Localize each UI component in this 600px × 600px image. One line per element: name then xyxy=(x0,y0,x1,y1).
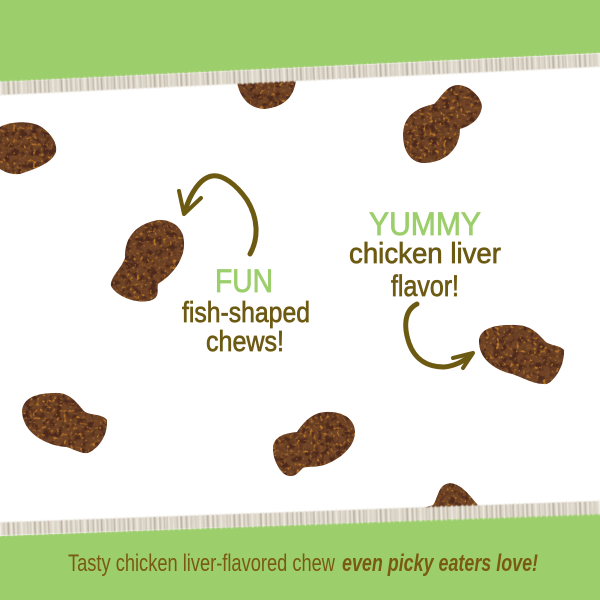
top woven fringe xyxy=(0,60,600,88)
bottom woven fringe xyxy=(0,508,600,529)
chew: top right xyxy=(403,85,482,163)
label: chews!: chews! xyxy=(206,326,284,358)
label: YUMMY: YUMMY xyxy=(369,206,481,242)
chew: right xyxy=(479,325,564,384)
label: flavor!: flavor! xyxy=(391,270,459,303)
top green band xyxy=(0,0,600,82)
label: fish-shaped: fish-shaped xyxy=(182,297,310,329)
chew: lower left xyxy=(22,393,107,453)
chew: center left xyxy=(111,220,184,302)
label: FUN: FUN xyxy=(215,263,273,299)
bottom green band xyxy=(0,513,600,600)
arrow: curving to right chew xyxy=(406,304,473,368)
chew: left edge xyxy=(0,122,56,174)
chew: top center, partly hidden xyxy=(236,74,296,109)
chew: lower center xyxy=(273,412,355,476)
tagline: Tasty chicken liver-flavored chew xyxy=(68,550,335,577)
tagline: even picky eaters love! xyxy=(342,550,538,577)
arrow: curving to center-left chew xyxy=(179,176,256,254)
label: chicken liver: chicken liver xyxy=(349,238,501,270)
chew: bottom peak, partly hidden xyxy=(417,483,478,514)
